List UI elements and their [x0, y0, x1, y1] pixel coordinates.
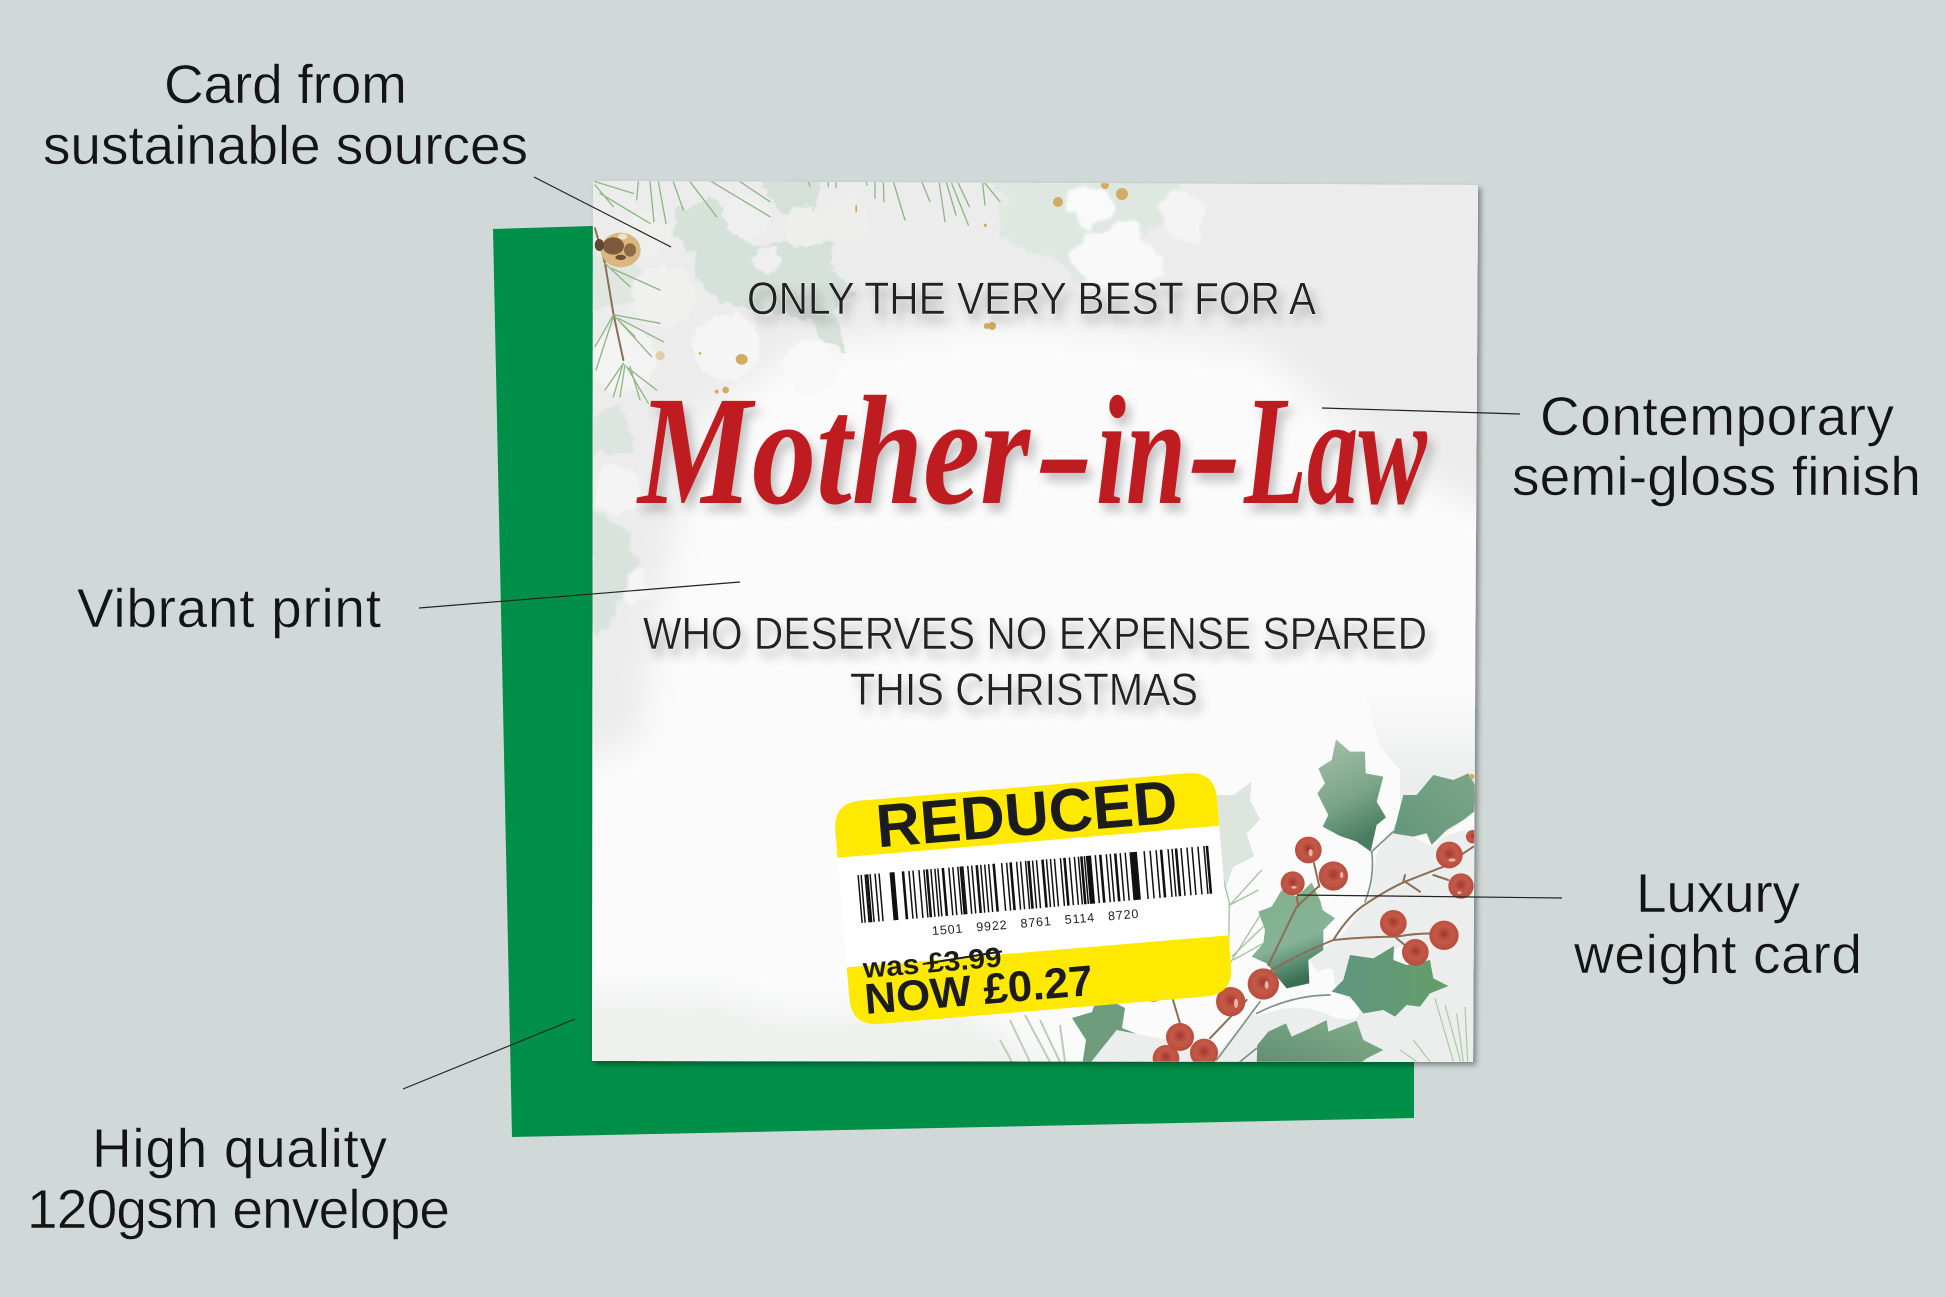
label: high quality envelope [27, 1117, 450, 1240]
card text last line: THIS CHRISTMAS [850, 664, 1198, 715]
branches [1170, 847, 1473, 1038]
pine sprig [1222, 870, 1263, 963]
green envelope [493, 226, 1414, 1137]
label: high quality envelope: 120gsm envelope [27, 1178, 450, 1240]
berry highlights [1234, 849, 1461, 1008]
card title script: Law [1243, 364, 1428, 537]
card watercolour artwork [560, 150, 1510, 1080]
greeting card [592, 180, 1484, 1068]
holly leaf right [1393, 773, 1475, 845]
bottom-left holly leaf behind label [1072, 1004, 1137, 1062]
sticker bottom yellow band [847, 935, 1233, 1026]
leader line: vibrant print [419, 582, 740, 608]
leader line: sustainable card [534, 177, 671, 247]
holly leaf centre [1252, 883, 1335, 988]
card title script: - [1036, 364, 1094, 537]
white halo [1250, 812, 1475, 1019]
label: luxury weight card: weight card [1573, 923, 1862, 985]
label: card from sustainable sources [43, 53, 528, 176]
sticker top yellow band [833, 771, 1219, 858]
holly leaf bottom [1257, 1020, 1383, 1063]
left edge foliage [592, 469, 640, 636]
label: luxury weight card: Luxury [1636, 862, 1800, 924]
leader line: envelope [403, 1019, 575, 1089]
label: card from sustainable sources: sustainable sources [43, 114, 528, 176]
label: contemporary semi-gloss finish: semi-gloss finish [1512, 445, 1921, 507]
holly leaf top [1317, 739, 1386, 852]
pine needles top [595, 182, 1000, 225]
top-left foliage [590, 177, 1000, 453]
holly leaf lower right [1332, 946, 1448, 1017]
pale leaves and white blossoms [590, 177, 868, 453]
card text top line: ONLY THE VERY BEST FOR A [747, 273, 1316, 324]
sticker body [833, 771, 1233, 1026]
label: high quality envelope: High quality [92, 1117, 388, 1179]
textured background [1091, 739, 1475, 1062]
pine sprigs [595, 182, 1000, 403]
card base [592, 181, 1478, 1062]
top centre foliage [988, 175, 1204, 330]
card title script: in [1096, 364, 1186, 537]
pine cone [595, 233, 641, 267]
reduced price sticker [832, 764, 1233, 1026]
stems [1217, 832, 1393, 1062]
label: vibrant print: Vibrant print [77, 577, 381, 639]
pine branch [595, 228, 623, 360]
gold specks [655, 205, 990, 394]
leader line: luxury weight [1297, 895, 1562, 898]
pale needles under label [1000, 1015, 1065, 1062]
lower-right holly sprig [1091, 739, 1475, 1062]
card title script: Mother [636, 364, 1031, 537]
barcode digits: 1501 9922 8761 5114 8720 [931, 907, 1139, 938]
label: card from sustainable sources: Card from [164, 53, 407, 115]
bottom right needles [1400, 998, 1468, 1062]
bottom wash [592, 986, 1033, 1062]
pine needles side [595, 263, 663, 403]
label: contemporary semi-gloss finish: Contemporary [1540, 385, 1894, 447]
pale leaf [1215, 782, 1260, 890]
berries [1143, 830, 1479, 1072]
REDUCED heading: REDUCED [873, 767, 1180, 860]
leader line: semi-gloss [1322, 408, 1520, 414]
now price: NOW £0.27 [863, 957, 1095, 1024]
barcode [858, 846, 1211, 923]
top wash [592, 181, 1478, 774]
card title script: - [1188, 364, 1242, 537]
was price: was £3.99 [861, 941, 1003, 984]
label: luxury weight card [1573, 862, 1862, 985]
card text lower line: WHO DESERVES NO EXPENSE SPARED [643, 608, 1427, 659]
strike line [922, 951, 1003, 964]
gold fleck [1469, 774, 1474, 779]
label: contemporary semi-gloss finish [1512, 385, 1921, 507]
